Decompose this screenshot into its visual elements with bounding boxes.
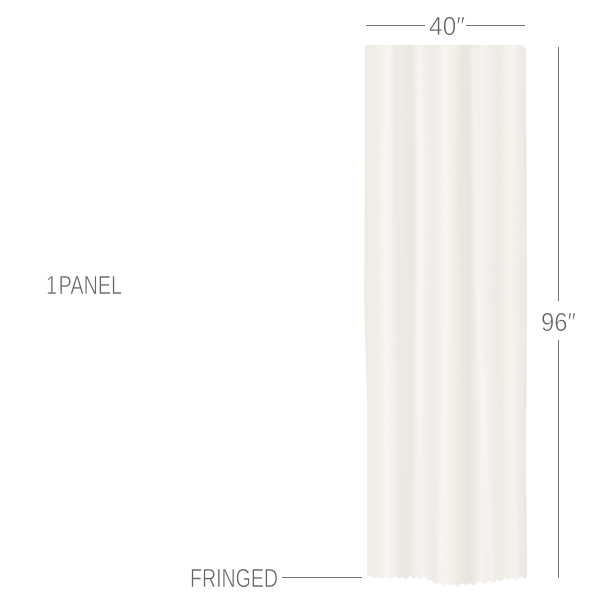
height dimension: 96 inches: 96″ <box>541 307 576 337</box>
curtain panel <box>360 40 532 590</box>
width dimension: 40 inches: 40″ <box>429 11 465 41</box>
label: 1 panel: 1 PANEL <box>46 270 122 300</box>
label: fringed with leader line: FRINGED <box>190 563 278 593</box>
fabric folds <box>413 574 414 575</box>
